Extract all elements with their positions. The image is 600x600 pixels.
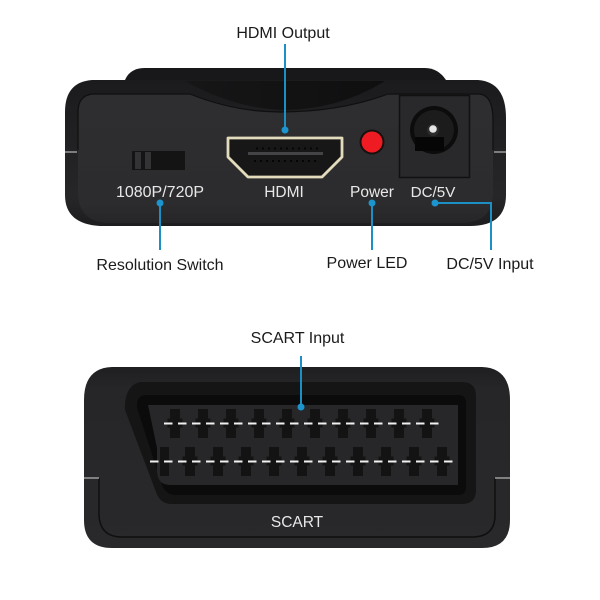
icon: power LED	[360, 130, 384, 154]
label: 1080P/720P: 1080P/720P	[116, 184, 204, 201]
SCART socket	[125, 382, 476, 504]
heading: SCART Input: SCART Input	[251, 330, 345, 347]
panel: top device	[65, 68, 506, 226]
icon: DC jack	[400, 96, 470, 178]
icon: HDMI port	[228, 138, 342, 177]
device body	[84, 367, 510, 548]
device body	[65, 80, 506, 226]
arrow: SCART Input	[298, 356, 304, 410]
device face	[78, 94, 493, 223]
label: SCART: SCART	[271, 514, 324, 531]
arrow: DC/5V Input	[432, 200, 491, 250]
heading: HDMI Output: HDMI Output	[236, 25, 330, 42]
arrow: Power LED	[368, 200, 376, 250]
panel: bottom device	[84, 367, 510, 548]
label: DC/5V: DC/5V	[411, 184, 456, 201]
top row pins	[164, 409, 439, 438]
arrow: Resolution Switch	[156, 200, 164, 250]
heading: DC/5V Input: DC/5V Input	[446, 256, 534, 273]
bottom row pins	[150, 447, 453, 476]
device rear bump	[125, 68, 446, 90]
label: HDMI: HDMI	[264, 184, 304, 201]
heading: Resolution Switch: Resolution Switch	[96, 257, 224, 274]
label: Power: Power	[350, 184, 394, 201]
icon: resolution switch	[132, 151, 185, 170]
heading: Power LED: Power LED	[327, 255, 407, 272]
arrow: HDMI Output	[282, 44, 288, 134]
